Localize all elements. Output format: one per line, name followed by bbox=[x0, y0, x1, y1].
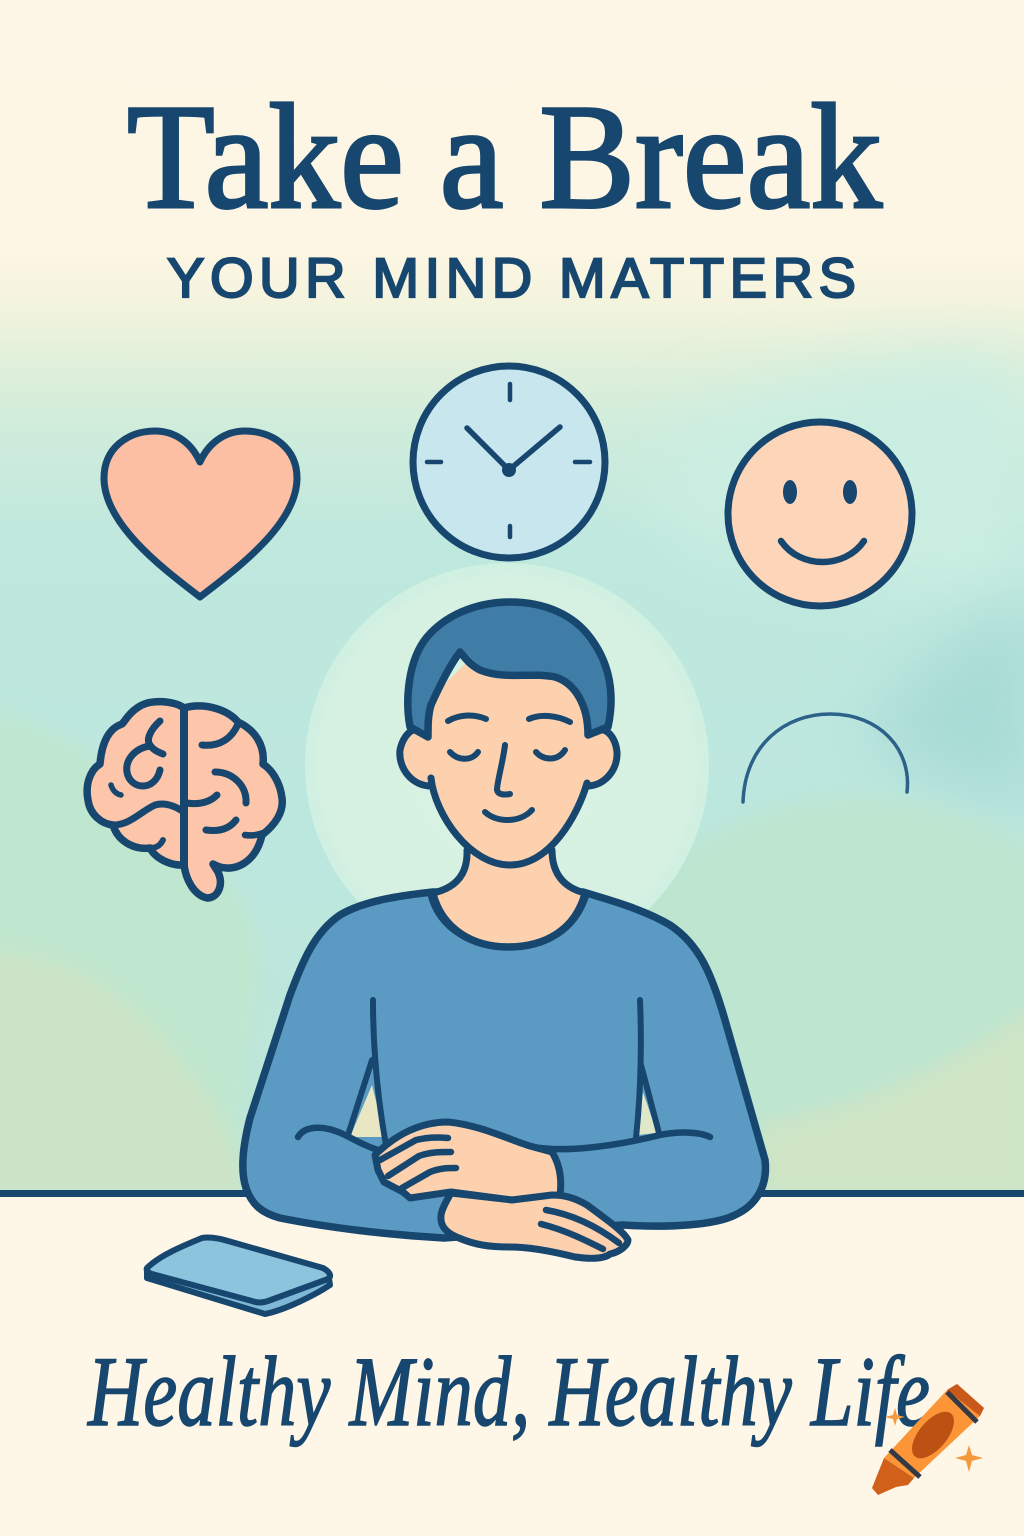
icon: clock bbox=[413, 366, 605, 558]
face bbox=[426, 620, 590, 865]
sweater and arms bbox=[243, 892, 765, 1238]
icon: brain bbox=[87, 702, 282, 898]
ears bbox=[400, 729, 433, 786]
person bbox=[243, 602, 765, 1258]
icon: smiling face bbox=[728, 422, 912, 606]
upper hand bbox=[375, 1122, 561, 1200]
phone bbox=[147, 1237, 330, 1314]
eyebrows bbox=[448, 715, 570, 722]
subtitle: YOUR MIND MATTERS bbox=[167, 246, 856, 309]
icon: heart bbox=[104, 431, 297, 597]
nose bbox=[497, 745, 510, 795]
table surface bbox=[0, 1190, 1024, 1536]
background wash bbox=[0, 0, 1024, 1200]
lower hand bbox=[441, 1193, 628, 1258]
smile bbox=[485, 810, 532, 820]
icon: crayon with sparkles bbox=[872, 1384, 984, 1495]
icon: empty arc bbox=[743, 714, 908, 802]
title: Take a Break bbox=[127, 74, 882, 240]
hair bbox=[408, 602, 611, 737]
closed eyes bbox=[450, 750, 565, 759]
neck bbox=[433, 850, 585, 947]
